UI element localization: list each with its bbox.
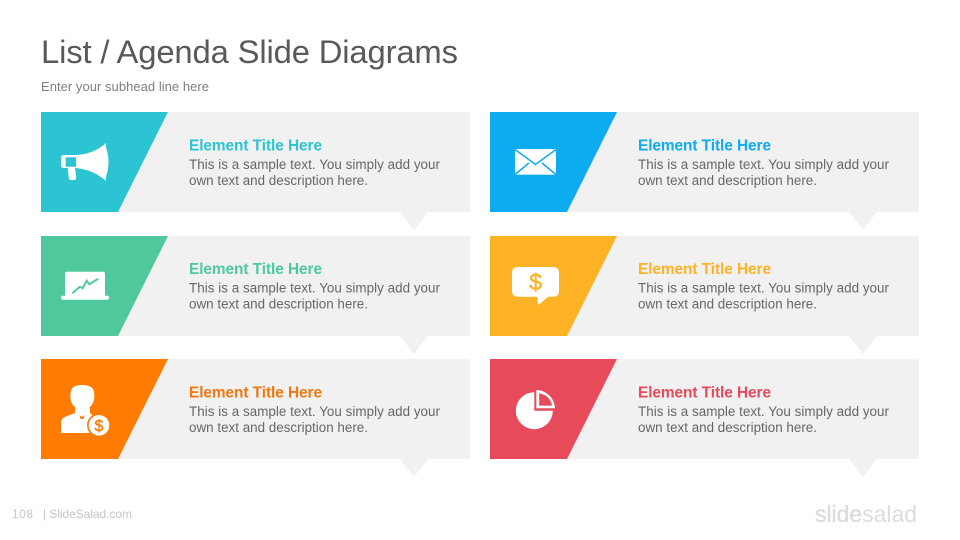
heading: Element Title Here [189, 261, 322, 278]
panel: megaphone item [41, 112, 470, 230]
colour block [41, 359, 168, 459]
page number: 108 [12, 507, 33, 521]
colour block [41, 236, 168, 336]
description: This is a sample text. You simply add your [189, 157, 441, 172]
card background with notch [41, 359, 470, 477]
colour block [490, 236, 617, 336]
panel: businessman item [41, 359, 470, 477]
description [638, 280, 890, 312]
card background with notch [490, 359, 919, 477]
description: own text and description here. [189, 420, 368, 435]
icon: megaphone [61, 143, 108, 181]
heading: Element Title Here [638, 261, 771, 278]
panel: pie chart item [490, 359, 919, 477]
colour block [490, 359, 617, 459]
card background with notch [41, 236, 470, 354]
description: This is a sample text. You simply add your [638, 404, 890, 419]
colour block [41, 112, 168, 212]
description: own text and description here. [638, 173, 817, 188]
description: own text and description here. [638, 296, 817, 312]
subtitle: Enter your subhead line here [41, 79, 209, 94]
icon: speech bubble with dollar [512, 267, 559, 305]
description [189, 280, 441, 312]
icon: businessman with dollar coin [61, 385, 111, 437]
icon: envelope [515, 149, 556, 175]
icon: businessman with dollar coin: $ [95, 418, 104, 435]
footer site name: | SlideSalad.com [43, 507, 132, 521]
description: This is a sample text. You simply add your [189, 280, 441, 296]
title: List / Agenda Slide Diagrams [41, 33, 458, 70]
description: This is a sample text. You simply add your [189, 404, 441, 419]
panel: laptop chart item [41, 236, 470, 354]
icon: laptop with chart [61, 272, 109, 300]
description [189, 404, 441, 435]
card background with notch [490, 236, 919, 354]
description [638, 404, 890, 435]
heading: Element Title Here [638, 138, 771, 154]
logo wordmark: slidesalad [815, 501, 917, 527]
icon: speech bubble with dollar: $ [529, 269, 542, 295]
heading: Element Title Here [638, 384, 771, 402]
panel: speech bubble dollar item [490, 236, 919, 354]
description [189, 157, 441, 188]
card background with notch [490, 112, 919, 230]
description: This is a sample text. You simply add your [638, 280, 890, 296]
panel: envelope item [490, 112, 919, 230]
description: own text and description here. [189, 296, 368, 312]
colour block [490, 112, 617, 212]
icon: pie chart [516, 390, 555, 429]
heading: Element Title Here [189, 384, 322, 402]
card background with notch [41, 112, 470, 230]
description: own text and description here. [189, 173, 368, 188]
description: This is a sample text. You simply add your [638, 157, 890, 172]
heading: Element Title Here [189, 138, 322, 154]
description: own text and description here. [638, 420, 817, 435]
description [638, 157, 890, 188]
